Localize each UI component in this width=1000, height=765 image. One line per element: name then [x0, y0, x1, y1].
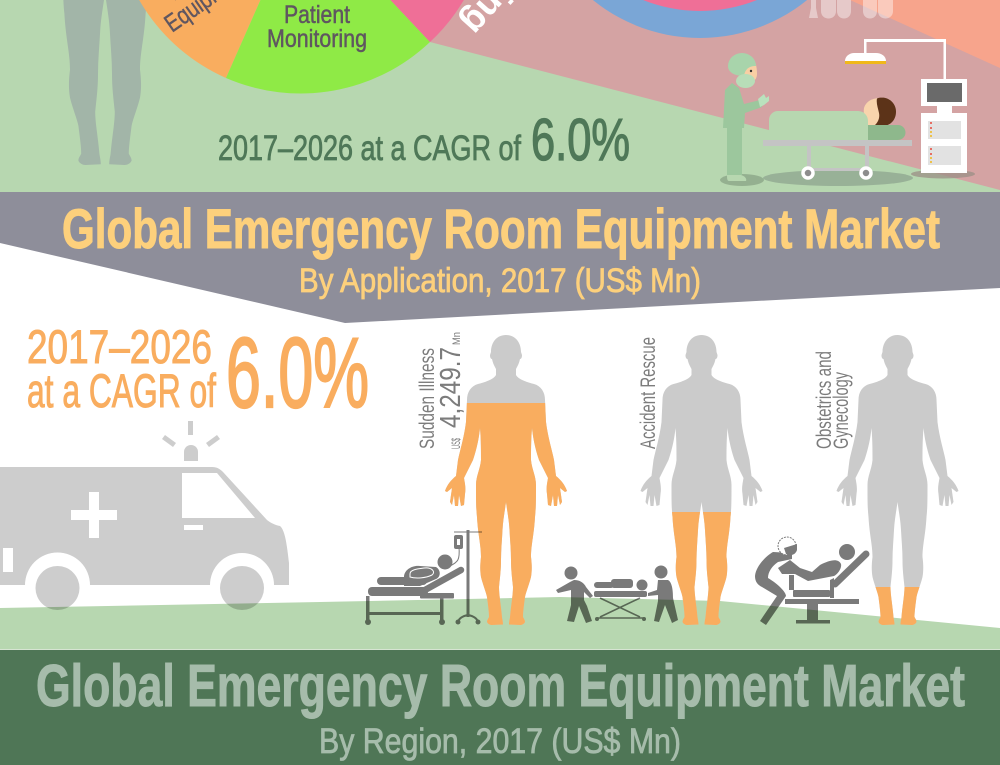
label: sudden illness: 4,249.7 — [435, 347, 467, 428]
label: obstetrics and gynecology: Gynecology — [830, 372, 853, 449]
label: patient monitoring — [267, 1, 367, 53]
figure: obstetrics and gynecology — [836, 335, 958, 625]
icon: patient on drip bed — [365, 530, 482, 625]
pie slice: pink segment — [302, 0, 490, 42]
panel: application banner — [0, 192, 1000, 323]
icon: gynecology exam — [755, 537, 866, 625]
text: upper CAGR: 2017–2026 at a CAGR of — [218, 129, 521, 168]
text: orange CAGR: 2017–2026 — [27, 320, 212, 373]
label: sudden illness: Mn — [451, 332, 463, 345]
text: orange CAGR: at a CAGR of — [27, 364, 217, 417]
label: sudden illness: Sudden Illness — [416, 348, 439, 449]
figure: sudden illness — [445, 335, 567, 625]
icon: rescue team with stretcher — [556, 566, 678, 623]
label: obstetrics and gynecology: Obstetrics and — [813, 351, 836, 449]
icon: patient on bed — [763, 98, 913, 186]
icon: operating lamp and monitor — [845, 39, 975, 178]
text: orange CAGR: 6.0% — [226, 317, 369, 428]
text: orange CAGR — [27, 317, 369, 428]
ground: green strip — [0, 597, 1000, 650]
text: upper CAGR — [218, 107, 630, 173]
text: upper CAGR: 6.0% — [531, 107, 630, 173]
icon: surgeon — [720, 53, 769, 186]
label: obstetrics and gynecology — [813, 351, 853, 449]
label: patient monitoring: Monitoring — [267, 25, 367, 53]
panel: region banner — [0, 649, 1000, 765]
subheading: application: By Application, 2017 (US$ Mn) — [299, 262, 701, 300]
label: sudden illness — [416, 332, 467, 449]
icon: ambulance — [0, 421, 289, 610]
label: sudden illness: US$ — [449, 438, 463, 449]
pie slice: equipment — [114, 0, 302, 78]
icon: legs silhouette, upper left — [20, 0, 190, 165]
label: accident rescue: Accident Rescue — [637, 337, 660, 449]
subheading: region: By Region, 2017 (US$ Mn) — [319, 722, 681, 761]
pie slice: patient monitoring — [226, 0, 430, 93]
icon: pale legs silhouette at top edge — [809, 0, 893, 18]
panel: top background — [0, 0, 1000, 192]
label: patient monitoring: Patient — [284, 1, 350, 29]
figure: accident rescue — [640, 335, 762, 625]
chart: segment pie — [114, 0, 490, 93]
